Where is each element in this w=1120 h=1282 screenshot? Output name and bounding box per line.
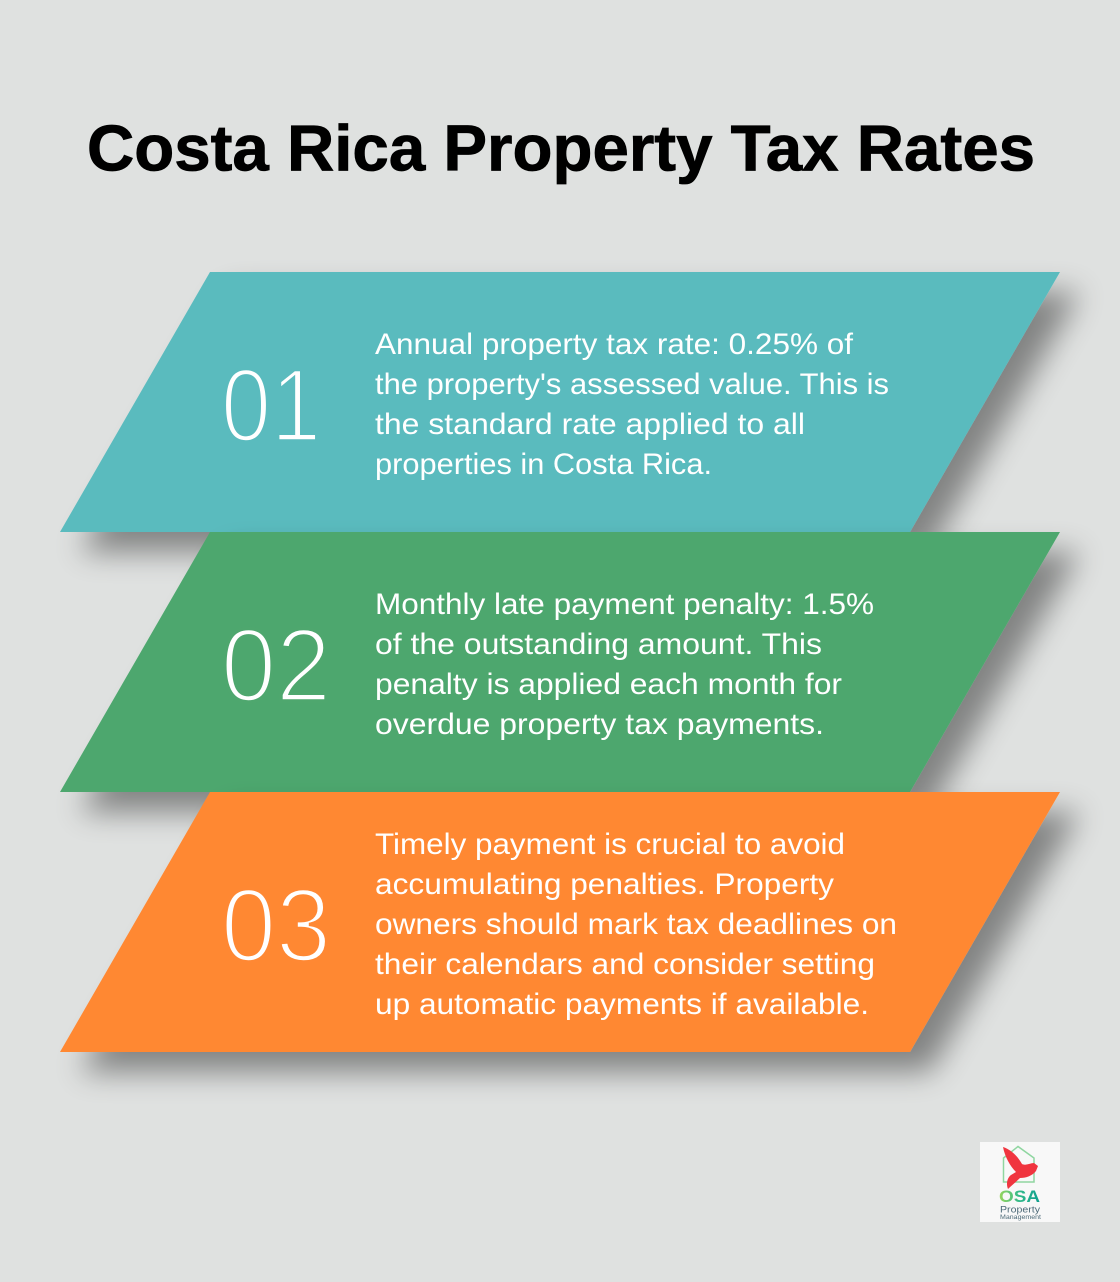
text block: step 02: of the outstanding amount. This <box>375 628 822 661</box>
banner shape: orange <box>60 792 1060 1052</box>
text block: step 02: penalty is applied each month for <box>375 668 842 701</box>
banner shape: teal <box>60 272 1060 532</box>
text block: step 03: up automatic payments if available. <box>375 988 869 1021</box>
panel: step 03 <box>60 792 1060 1052</box>
text block: step 03: owners should mark tax deadlines on <box>375 908 897 941</box>
text block: step 01: the property's assessed value. This is <box>375 368 889 401</box>
logo: OSA Property Management <box>980 1142 1060 1222</box>
text block: step 02: Monthly late payment penalty: 1.5% <box>375 588 874 621</box>
text block: step 03 <box>375 828 897 1021</box>
number 01: 01 <box>221 348 321 464</box>
text block: step 01: properties in Costa Rica. <box>375 448 712 481</box>
text block: step 01 <box>375 328 889 481</box>
title: Costa Rica Property Tax Rates <box>87 112 1035 184</box>
text block: step 03: their calendars and consider setting <box>375 948 875 981</box>
logo subtitle 2: Management <box>1000 1215 1041 1221</box>
banner shape: green <box>60 532 1060 792</box>
number 02: 02 <box>221 608 331 724</box>
text block: step 02: overdue property tax payments. <box>375 708 824 741</box>
text block: step 03: accumulating penalties. Property <box>375 868 834 901</box>
icon: red bird <box>1003 1147 1038 1189</box>
text block: step 01: the standard rate applied to all <box>375 408 805 441</box>
text block: step 01: Annual property tax rate: 0.25% of <box>375 328 854 361</box>
number 03: 03 <box>221 868 331 984</box>
panel: step 01 <box>60 272 1060 532</box>
logo wordmark: OSA <box>999 1187 1040 1206</box>
icon: house outline <box>1004 1146 1034 1182</box>
logo subtitle: Property <box>1000 1204 1040 1216</box>
panel: step 02 <box>60 532 1060 792</box>
text block: step 03: Timely payment is crucial to avoid <box>375 828 845 861</box>
text block: step 02 <box>375 588 874 741</box>
